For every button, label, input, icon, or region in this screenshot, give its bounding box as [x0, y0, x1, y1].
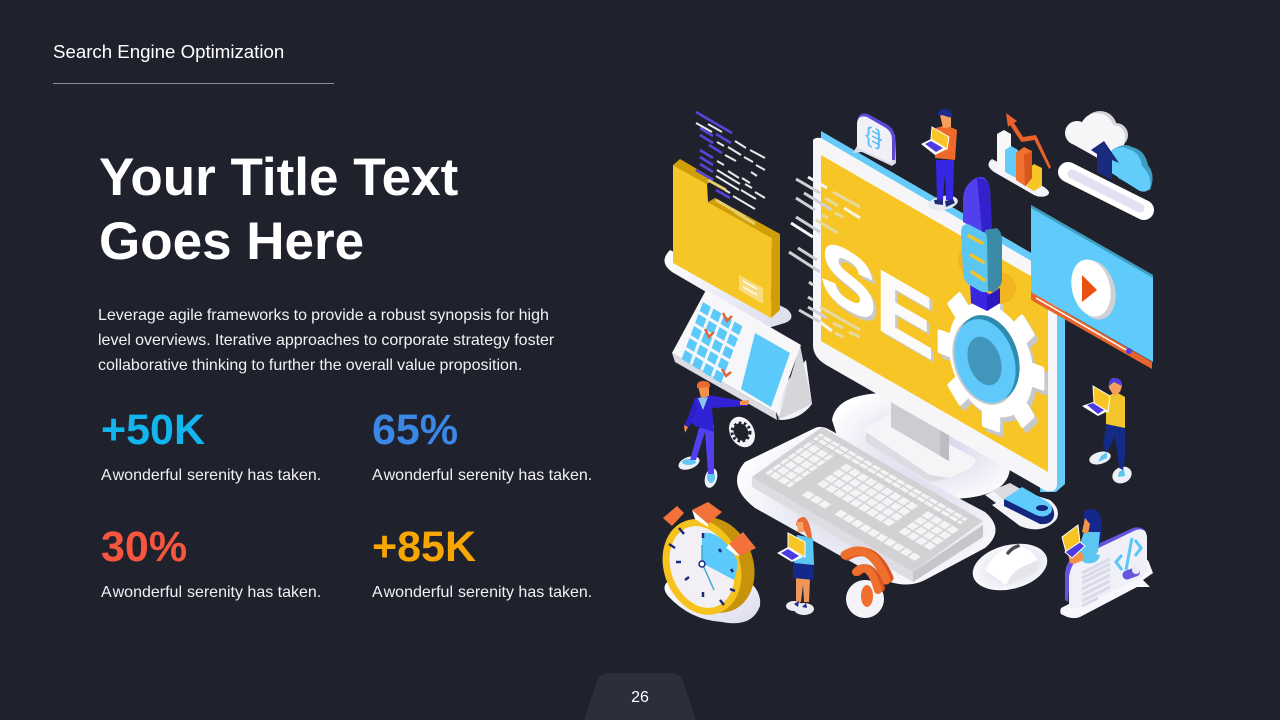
stopwatch	[650, 502, 769, 626]
code bubble	[1060, 527, 1153, 618]
stat: 30%: 30%	[101, 523, 187, 571]
stat: 30%: A wonderful serenity has taken.	[101, 584, 321, 601]
person with laptop on monitor	[921, 109, 959, 212]
stat: +85K: +85K	[372, 523, 476, 571]
stat: +85K: A wonderful serenity has taken.	[372, 584, 592, 601]
gear	[938, 271, 1048, 454]
small gear icon	[724, 412, 760, 452]
body text: level overviews. Iterative approaches to corporate strategy foster	[98, 332, 554, 349]
stat: +50K	[101, 406, 321, 484]
magnifier handle tool	[958, 177, 1016, 311]
monitor neck and base	[865, 401, 975, 482]
title: Your Title Text	[99, 148, 458, 207]
stat: +50K: +50K	[101, 406, 205, 454]
code lines above folder	[696, 112, 765, 224]
person with yellow shirt	[1082, 378, 1134, 486]
SEO letters: E	[876, 249, 933, 379]
stat: 65%	[372, 406, 592, 484]
speech bubble with braces: }	[875, 124, 883, 151]
stat: 65%: A wonderful serenity has taken.	[372, 467, 592, 484]
monitor stand shadow	[832, 393, 1010, 499]
cloud upload	[1065, 111, 1153, 210]
body text: collaborative thinking to further the overall value proposition.	[98, 357, 522, 374]
speech bubble with braces	[853, 113, 896, 166]
calendar panel	[672, 290, 812, 420]
person pointing	[677, 381, 749, 489]
stat: 65%: 65%	[372, 406, 458, 454]
section header: Search Engine Optimization	[53, 41, 284, 62]
stat: +85K	[372, 523, 592, 601]
SEO letters: S	[824, 223, 879, 346]
page number tab: 26	[631, 689, 649, 706]
mouse	[968, 536, 1052, 598]
speech bubble with braces: {	[865, 121, 873, 148]
wifi signal icon	[840, 551, 890, 624]
title: Goes Here	[99, 212, 364, 271]
code lines beside monitor	[789, 177, 860, 337]
video panel	[1031, 205, 1153, 369]
keyboard	[737, 427, 996, 585]
monitor	[813, 131, 1065, 492]
SEO letters: S	[821, 219, 876, 342]
woman sitting on code bubble	[1062, 509, 1102, 564]
SEO letters	[821, 219, 936, 382]
standing woman with laptop	[777, 517, 814, 615]
USB stick	[985, 483, 1058, 529]
body text: Leverage agile frameworks to provide a robust synopsis for high	[98, 307, 549, 324]
folder	[664, 159, 792, 328]
SEO letters: E	[879, 252, 936, 382]
stat: 30%	[101, 523, 321, 601]
header divider	[53, 83, 334, 84]
body text	[98, 307, 554, 374]
bar chart with arrow	[988, 113, 1051, 197]
title	[99, 148, 458, 271]
stat: +50K: A wonderful serenity has taken.	[101, 467, 321, 484]
